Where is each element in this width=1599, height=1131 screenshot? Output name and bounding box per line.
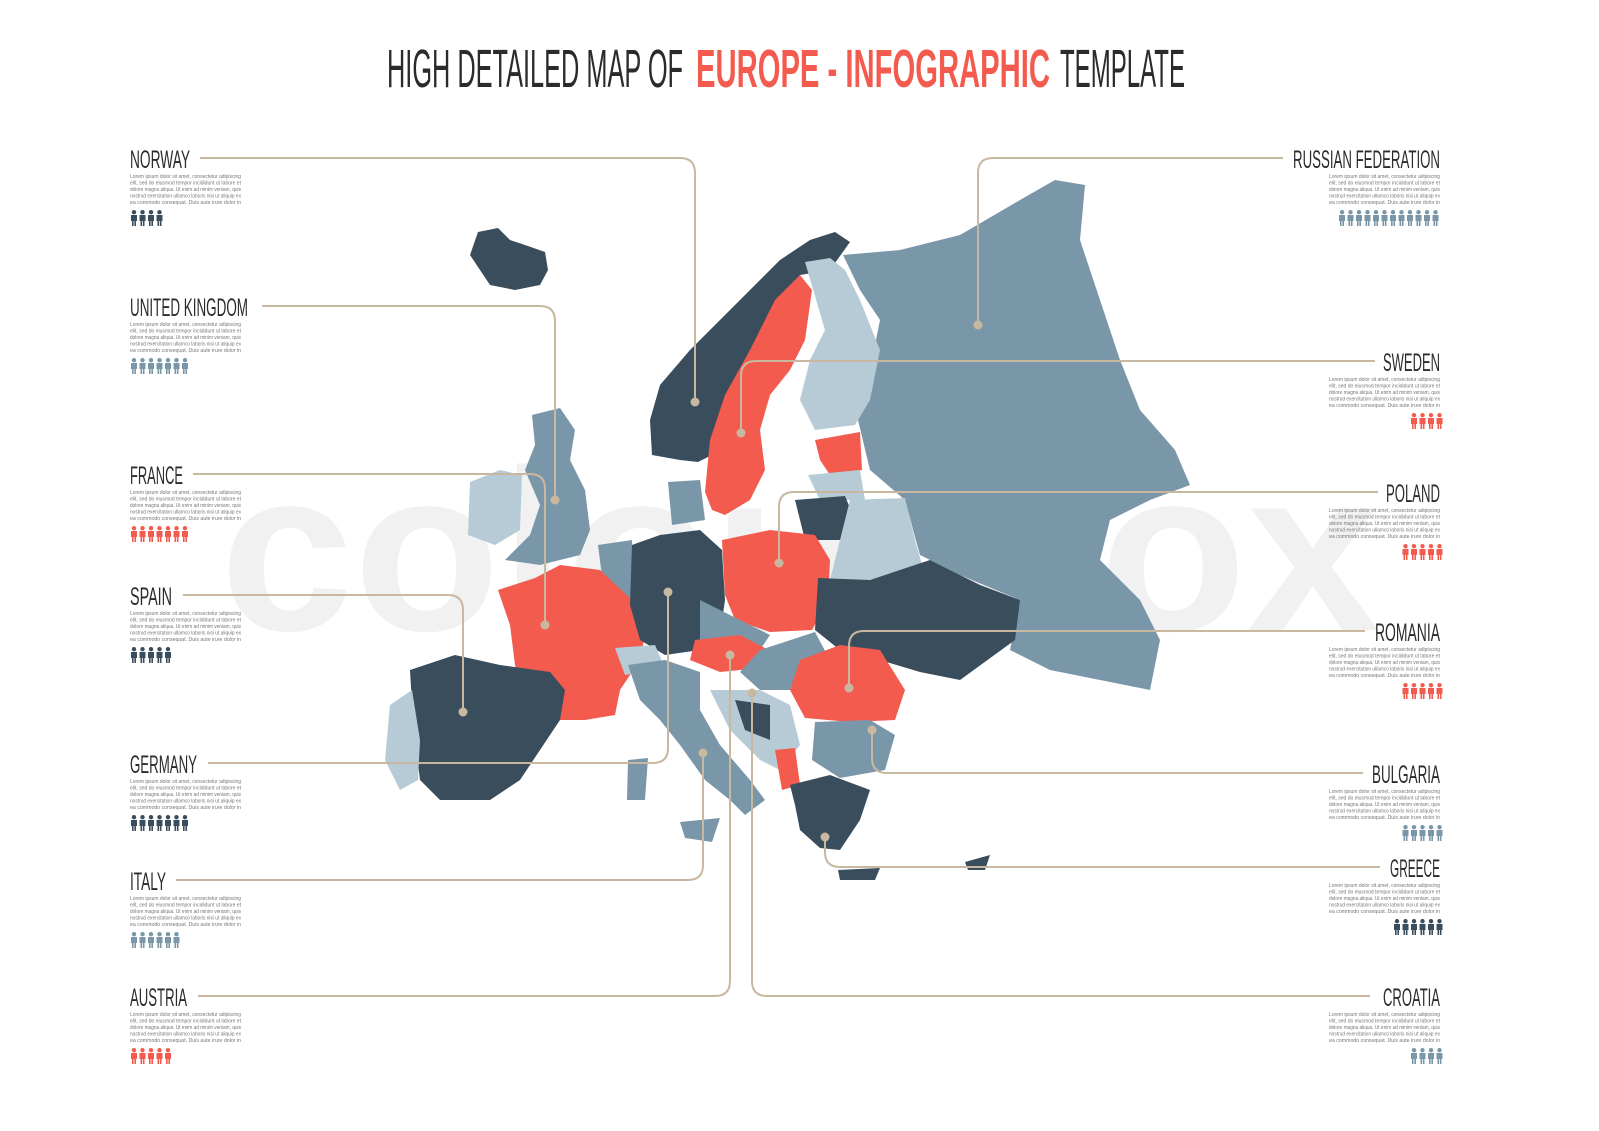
panel: poland: ea commodo consequat. Duis aute irure dolor in bbox=[1329, 534, 1440, 540]
panel: poland bbox=[1329, 480, 1442, 560]
country: poland bbox=[722, 530, 830, 632]
panel: poland: nostrud exercitation ullamco laboris nisi ut aliquip ex bbox=[1329, 528, 1440, 534]
panel: bulgaria: BULGARIA bbox=[1372, 761, 1440, 789]
panel: germany: Lorem ipsum dolor sit amet, consectetur adipiscing bbox=[130, 779, 241, 785]
panel: germany: nostrud exercitation ullamco laboris nisi ut aliquip ex bbox=[130, 798, 241, 804]
panel: sweden: nostrud exercitation ullamco laboris nisi ut aliquip ex bbox=[1329, 396, 1440, 402]
panel: russian federation: ea commodo consequat. Duis aute irure dolor in bbox=[1329, 200, 1440, 206]
panel: austria bbox=[130, 984, 241, 1064]
panel: russian federation: dolore magna aliqua. Ut enim ad minim veniam, quis bbox=[1329, 187, 1440, 193]
panel: russian federation: elit, sed do eiusmod tempor incididunt ut labore et bbox=[1329, 180, 1440, 186]
country: russia bbox=[843, 180, 1190, 690]
panel: bulgaria bbox=[1329, 761, 1442, 841]
panel: italy: nostrud exercitation ullamco laboris nisi ut aliquip ex bbox=[130, 916, 241, 922]
country: germany bbox=[630, 530, 725, 655]
country: balkans bbox=[710, 690, 800, 770]
country: sweden bbox=[705, 275, 812, 515]
panel: sweden bbox=[1329, 349, 1442, 429]
panel: italy: dolore magna aliqua. Ut enim ad minim veniam, quis bbox=[130, 909, 241, 915]
panel: croatia: CROATIA bbox=[1383, 984, 1440, 1012]
panel: italy bbox=[130, 868, 241, 948]
country: romania bbox=[790, 645, 905, 722]
panel: romania: elit, sed do eiusmod tempor incididunt ut labore et bbox=[1329, 654, 1440, 660]
panel: croatia: ea commodo consequat. Duis aute irure dolor in bbox=[1329, 1038, 1440, 1044]
country: spain bbox=[410, 655, 565, 800]
panel: united kingdom: UNITED KINGDOM bbox=[130, 294, 248, 322]
panel: united kingdom bbox=[130, 294, 248, 374]
panel: norway bbox=[130, 146, 241, 226]
panel: croatia: nostrud exercitation ullamco laboris nisi ut aliquip ex bbox=[1329, 1032, 1440, 1038]
panel: poland: dolore magna aliqua. Ut enim ad minim veniam, quis bbox=[1329, 521, 1440, 527]
panel: united kingdom: nostrud exercitation ullamco laboris nisi ut aliquip ex bbox=[130, 342, 241, 348]
country: united kingdom bbox=[505, 408, 590, 565]
panel: greece: dolore magna aliqua. Ut enim ad minim veniam, quis bbox=[1329, 896, 1440, 902]
panel: poland: POLAND bbox=[1386, 480, 1440, 508]
panel: sweden: SWEDEN bbox=[1383, 349, 1440, 377]
panel: france: dolore magna aliqua. Ut enim ad minim veniam, quis bbox=[130, 503, 241, 509]
panel: norway: Lorem ipsum dolor sit amet, consectetur adipiscing bbox=[130, 174, 241, 180]
panel: greece: Lorem ipsum dolor sit amet, consectetur adipiscing bbox=[1329, 883, 1440, 889]
panel: spain: dolore magna aliqua. Ut enim ad minim veniam, quis bbox=[130, 624, 241, 630]
panel: romania bbox=[1329, 619, 1442, 699]
country: norway bbox=[650, 232, 850, 462]
panel: croatia: dolore magna aliqua. Ut enim ad minim veniam, quis bbox=[1329, 1025, 1440, 1031]
country: italy bbox=[628, 660, 765, 815]
country: iceland bbox=[470, 228, 548, 290]
country: bulgaria bbox=[812, 720, 895, 778]
panel: france: nostrud exercitation ullamco laboris nisi ut aliquip ex bbox=[130, 510, 241, 516]
panel: united kingdom: Lorem ipsum dolor sit amet, consectetur adipiscing bbox=[130, 322, 241, 328]
panel: poland: elit, sed do eiusmod tempor incididunt ut labore et bbox=[1329, 514, 1440, 520]
country: czech/austria/hungary bbox=[700, 600, 770, 650]
map of europe bbox=[385, 180, 1190, 880]
panel: austria: elit, sed do eiusmod tempor incididunt ut labore et bbox=[130, 1018, 241, 1024]
panel: bulgaria: ea commodo consequat. Duis aute irure dolor in bbox=[1329, 815, 1440, 821]
panel: russian federation: Lorem ipsum dolor sit amet, consectetur adipiscing bbox=[1329, 174, 1440, 180]
text: TEMPLATE bbox=[1060, 39, 1185, 99]
text: GREECE bbox=[1390, 855, 1440, 883]
country: belarus bbox=[830, 498, 925, 585]
panel: france: FRANCE bbox=[130, 462, 183, 490]
panel: russian federation: nostrud exercitation ullamco laboris nisi ut aliquip ex bbox=[1329, 194, 1440, 200]
panel: spain: SPAIN bbox=[130, 583, 172, 611]
panel: romania: ROMANIA bbox=[1375, 619, 1440, 647]
panel: sweden: dolore magna aliqua. Ut enim ad minim veniam, quis bbox=[1329, 390, 1440, 396]
panel: sweden: Lorem ipsum dolor sit amet, consectetur adipiscing bbox=[1329, 377, 1440, 383]
panel: austria: ea commodo consequat. Duis aute irure dolor in bbox=[130, 1038, 241, 1044]
panel: sweden: ea commodo consequat. Duis aute irure dolor in bbox=[1329, 403, 1440, 409]
title: HIGH DETAILED MAP OF bbox=[387, 39, 683, 99]
panel: greece: nostrud exercitation ullamco laboris nisi ut aliquip ex bbox=[1329, 902, 1440, 908]
country: baltics bbox=[815, 432, 862, 475]
panel: france: Lorem ipsum dolor sit amet, consectetur adipiscing bbox=[130, 490, 241, 496]
panel: germany bbox=[130, 751, 241, 831]
panel: france bbox=[130, 462, 241, 542]
panel: spain: nostrud exercitation ullamco laboris nisi ut aliquip ex bbox=[130, 630, 241, 636]
country: ireland bbox=[468, 470, 522, 545]
panel: austria: dolore magna aliqua. Ut enim ad minim veniam, quis bbox=[130, 1025, 241, 1031]
panel: germany: elit, sed do eiusmod tempor incididunt ut labore et bbox=[130, 786, 241, 792]
panel: spain bbox=[130, 583, 241, 663]
country: greece bbox=[790, 775, 870, 850]
country: finland bbox=[800, 258, 880, 430]
panel: romania: nostrud exercitation ullamco laboris nisi ut aliquip ex bbox=[1329, 666, 1440, 672]
panel: spain: ea commodo consequat. Duis aute irure dolor in bbox=[130, 637, 241, 643]
panel: germany: GERMANY bbox=[130, 751, 197, 779]
panel: spain: Lorem ipsum dolor sit amet, consectetur adipiscing bbox=[130, 611, 241, 617]
panel: croatia: Lorem ipsum dolor sit amet, consectetur adipiscing bbox=[1329, 1012, 1440, 1018]
country: france bbox=[498, 565, 648, 720]
country: portugal bbox=[385, 690, 420, 790]
country: lithuania bbox=[795, 496, 855, 540]
panel: norway: NORWAY bbox=[130, 146, 190, 174]
watermark: colourbox bbox=[220, 422, 1380, 679]
panel: norway: ea commodo consequat. Duis aute irure dolor in bbox=[130, 200, 241, 206]
panel: bulgaria: Lorem ipsum dolor sit amet, consectetur adipiscing bbox=[1329, 789, 1440, 795]
panel: austria: nostrud exercitation ullamco laboris nisi ut aliquip ex bbox=[130, 1032, 241, 1038]
panel: russian federation bbox=[1293, 146, 1440, 226]
panel: france: ea commodo consequat. Duis aute irure dolor in bbox=[130, 516, 241, 522]
panel: united kingdom: dolore magna aliqua. Ut enim ad minim veniam, quis bbox=[130, 335, 241, 341]
panel: romania: ea commodo consequat. Duis aute irure dolor in bbox=[1329, 673, 1440, 679]
panel: bulgaria: nostrud exercitation ullamco laboris nisi ut aliquip ex bbox=[1329, 808, 1440, 814]
panel: italy: ea commodo consequat. Duis aute irure dolor in bbox=[130, 922, 241, 928]
panel: greece bbox=[1329, 855, 1442, 935]
country: denmark and benelux bbox=[668, 480, 705, 525]
panel: bulgaria: dolore magna aliqua. Ut enim ad minim veniam, quis bbox=[1329, 802, 1440, 808]
country: switzerland bbox=[615, 645, 665, 675]
title: EUROPE - INFOGRAPHIC bbox=[696, 39, 1050, 99]
panel: romania: dolore magna aliqua. Ut enim ad minim veniam, quis bbox=[1329, 660, 1440, 666]
panel: norway: elit, sed do eiusmod tempor incididunt ut labore et bbox=[130, 180, 241, 186]
panel: sweden: elit, sed do eiusmod tempor incididunt ut labore et bbox=[1329, 384, 1440, 390]
panel: croatia bbox=[1329, 984, 1442, 1064]
connector lines bbox=[176, 158, 1380, 996]
panel: poland: Lorem ipsum dolor sit amet, consectetur adipiscing bbox=[1329, 508, 1440, 514]
panel: spain: elit, sed do eiusmod tempor incididunt ut labore et bbox=[130, 618, 241, 624]
panel: austria: AUSTRIA bbox=[130, 984, 187, 1012]
panel: norway: dolore magna aliqua. Ut enim ad minim veniam, quis bbox=[130, 187, 241, 193]
panel: united kingdom: elit, sed do eiusmod tempor incididunt ut labore et bbox=[130, 328, 241, 334]
panel: russian federation: RUSSIAN FEDERATION bbox=[1293, 146, 1440, 174]
panel: italy: Lorem ipsum dolor sit amet, consectetur adipiscing bbox=[130, 896, 241, 902]
panel: germany: dolore magna aliqua. Ut enim ad minim veniam, quis bbox=[130, 792, 241, 798]
panel: united kingdom: ea commodo consequat. Duis aute irure dolor in bbox=[130, 348, 241, 354]
panel: romania: Lorem ipsum dolor sit amet, consectetur adipiscing bbox=[1329, 647, 1440, 653]
panel: greece: elit, sed do eiusmod tempor incididunt ut labore et bbox=[1329, 890, 1440, 896]
panel: germany: ea commodo consequat. Duis aute irure dolor in bbox=[130, 805, 241, 811]
panel: italy: ITALY bbox=[130, 868, 166, 896]
panel: greece: ea commodo consequat. Duis aute irure dolor in bbox=[1329, 909, 1440, 915]
panel: italy: elit, sed do eiusmod tempor incididunt ut labore et bbox=[130, 902, 241, 908]
panel: norway: nostrud exercitation ullamco laboris nisi ut aliquip ex bbox=[130, 194, 241, 200]
country: ukraine bbox=[815, 560, 1020, 680]
panel: austria: Lorem ipsum dolor sit amet, consectetur adipiscing bbox=[130, 1012, 241, 1018]
panel: france: elit, sed do eiusmod tempor incididunt ut labore et bbox=[130, 496, 241, 502]
panel: bulgaria: elit, sed do eiusmod tempor incididunt ut labore et bbox=[1329, 796, 1440, 802]
panel: croatia: elit, sed do eiusmod tempor incididunt ut labore et bbox=[1329, 1018, 1440, 1024]
